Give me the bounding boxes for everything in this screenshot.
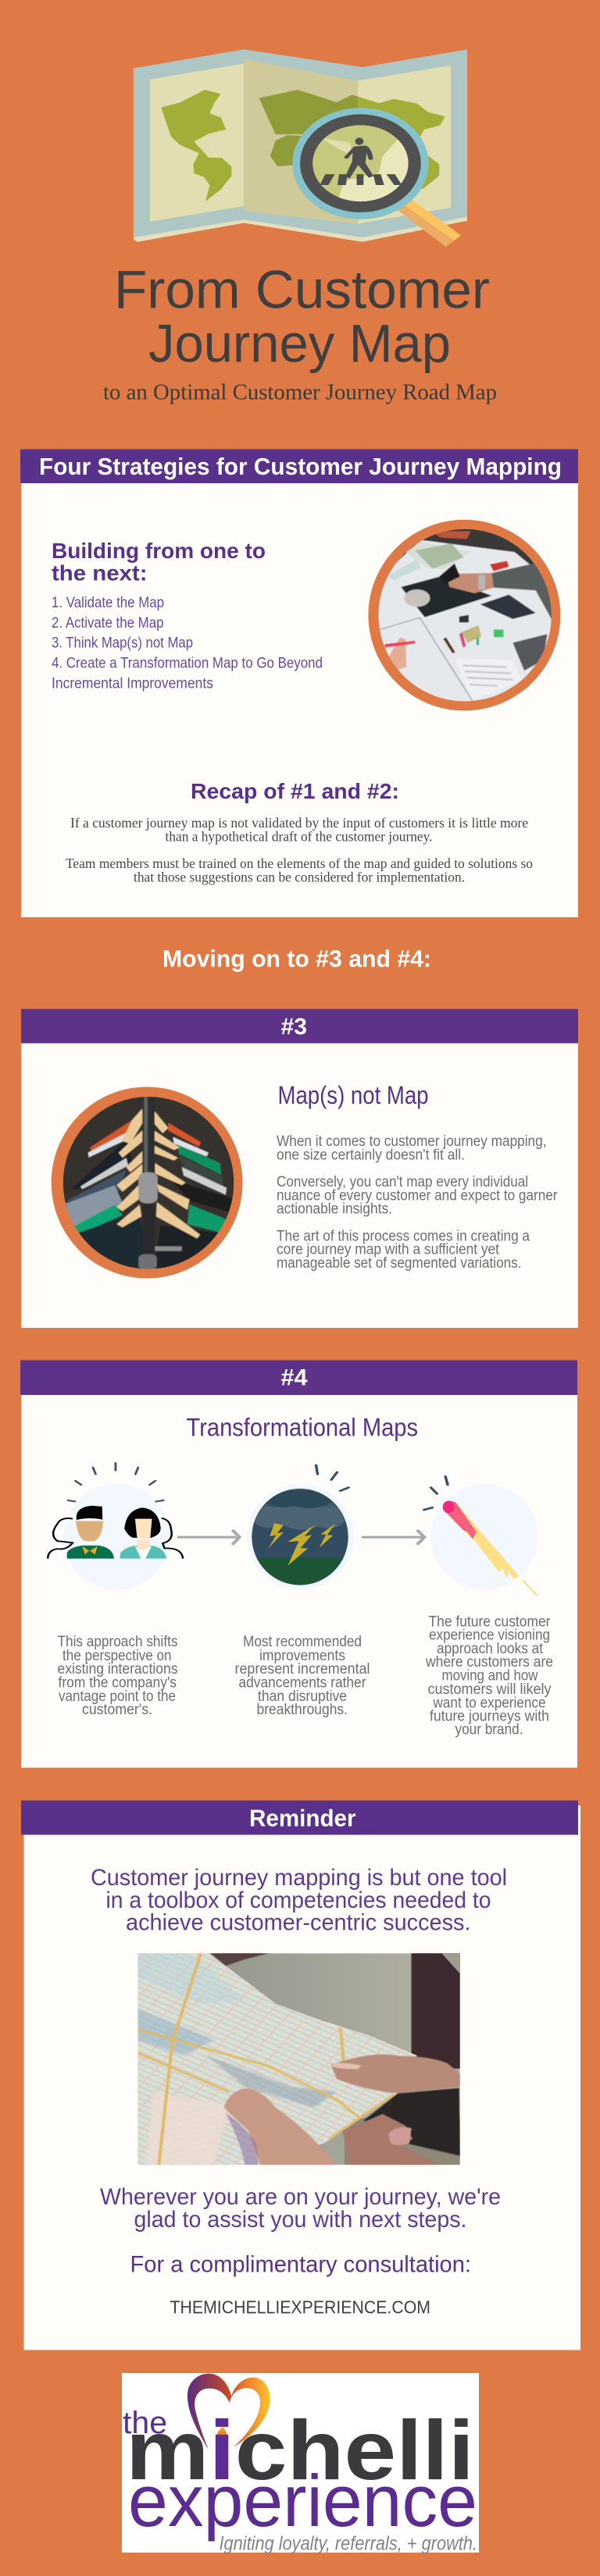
- icon: two customers with radiating lines: [48, 1463, 183, 1590]
- icon: folded map with magnifying glass: [134, 49, 467, 247]
- text: first column: customer's.: [82, 1702, 152, 1718]
- list of four strategies: 1. Validate the Map: [52, 594, 164, 611]
- photo: team working over printed maps on a table: [368, 520, 560, 710]
- body text: maps not map: core journey map with a sufficient yet: [277, 1241, 500, 1258]
- logo word: michelli: michelli: [126, 2403, 474, 2497]
- heading: moving on: Moving on to #3 and #4:: [162, 945, 431, 973]
- website: THEMICHELLIEXPERIENCE.COM: [170, 2297, 430, 2317]
- body text: maps not map: [277, 1133, 558, 1272]
- text: third column: future journeys with: [430, 1708, 549, 1725]
- photo: hands holding a street map: [130, 1949, 463, 2170]
- list of four strategies: 2. Activate the Map: [52, 614, 164, 632]
- arrow: [362, 1530, 424, 1545]
- header: #4: #4: [281, 1364, 308, 1391]
- text: third column: moving and how: [442, 1667, 538, 1685]
- reminder text: in a toolbox of competencies needed to: [106, 1888, 491, 1913]
- text: second column: than disruptive: [258, 1688, 347, 1705]
- body text: maps not map: manageable set of segmented variations.: [277, 1255, 522, 1272]
- icon: comet: [424, 1476, 538, 1596]
- recap text: than a hypothetical draft of the customer journey.: [166, 829, 433, 845]
- recap text: that those suggestions can be considered for implementation.: [134, 870, 465, 885]
- text: second column: breakthroughs.: [256, 1702, 348, 1718]
- subtitle: to an Optimal Customer Journey Road Map: [103, 381, 497, 404]
- text: third column: The future customer: [428, 1614, 551, 1630]
- body text: maps not map: actionable insights.: [277, 1201, 392, 1218]
- panel: four strategies: [20, 450, 578, 917]
- title: [114, 259, 490, 373]
- header: reminder: [21, 1800, 578, 1834]
- logo tagline: Igniting loyalty, referrals, + growth.: [219, 2532, 477, 2554]
- list of four strategies: 4. Create a Transformation Map to Go Beyond: [52, 654, 323, 671]
- text: wherever you are: glad to assist you with next steps.: [134, 2207, 467, 2233]
- heading: maps not map: Map(s) not Map: [278, 1081, 428, 1109]
- text: third column: experience visioning: [429, 1627, 550, 1644]
- text: second column: improvements: [259, 1648, 345, 1664]
- text: wherever you are: Wherever you are on your journey, we're: [100, 2184, 501, 2210]
- text: third column: customers will likely: [428, 1681, 552, 1698]
- text: first column: from the company's: [58, 1675, 177, 1691]
- icon: storm clouds with lightning bolts: [247, 1465, 354, 1590]
- body text: maps not map: The art of this process comes in creating a: [277, 1229, 530, 1244]
- list of four strategies: 3. Think Map(s) not Map: [52, 634, 193, 651]
- reminder text: achieve customer-centric success.: [126, 1909, 470, 1936]
- icon: heart with flame: [188, 2374, 270, 2450]
- list of four strategies: Incremental Improvements: [52, 674, 213, 692]
- text: second column: Most recommended: [243, 1634, 362, 1650]
- body text: maps not map: Conversely, you can't map every individual: [277, 1174, 528, 1190]
- body text: maps not map: When it comes to customer journey mapping,: [277, 1133, 547, 1150]
- heading: building from one to the next: [52, 539, 266, 585]
- recap text: [66, 815, 533, 885]
- recap text: Team members must be trained on the elements of the map and guided to solutions so: [66, 856, 533, 871]
- body text: maps not map: one size certainly doesn't fit all.: [277, 1147, 465, 1163]
- text: third column: want to experience: [433, 1695, 545, 1711]
- panel: reminder: [21, 1800, 580, 2350]
- text: first column: existing interactions: [58, 1661, 178, 1678]
- text: second column: represent incremental: [234, 1661, 370, 1678]
- text: first column: the perspective on: [62, 1648, 172, 1664]
- title: Journey Map: [148, 314, 451, 373]
- text: wherever you are: [100, 2184, 501, 2233]
- heading: transformational maps: Transformational Maps: [186, 1413, 418, 1441]
- text: third column: approach looks at: [437, 1641, 544, 1657]
- text: first column: [58, 1634, 178, 1718]
- header: #4: [20, 1360, 577, 1395]
- title: From Customer: [114, 259, 490, 320]
- reminder text: [91, 1865, 507, 1936]
- text: first column: This approach shifts: [58, 1634, 178, 1650]
- body text: maps not map: nuance of every customer and expect to garner: [277, 1188, 558, 1204]
- header: reminder: Reminder: [249, 1805, 356, 1831]
- header: #3: #3: [281, 1014, 307, 1040]
- reminder text: Customer journey mapping is but one tool: [91, 1865, 507, 1891]
- header: four strategies: Four Strategies for Customer Journey Mapping: [39, 453, 562, 480]
- heading: building from one to the next: Building from one to: [52, 539, 266, 563]
- text: second column: advancements rather: [239, 1675, 366, 1691]
- logo word: experience: experience: [128, 2460, 477, 2542]
- list of four strategies: [52, 594, 323, 692]
- arrow: [177, 1530, 240, 1545]
- logo: the michelli experience: [122, 2373, 479, 2554]
- panel: #4 transformational maps: [20, 1360, 577, 1767]
- text: third column: where customers are: [425, 1654, 553, 1670]
- text: first column: vantage point to the: [59, 1688, 176, 1705]
- recap text: If a customer journey map is not validated by the input of customers it is little more: [70, 815, 528, 831]
- text: third column: your brand.: [455, 1722, 523, 1738]
- photo: shirts on hangers along a rack: [52, 1087, 243, 1279]
- text: second column: [234, 1634, 370, 1718]
- panel: #3 maps not map: [21, 1009, 578, 1328]
- text: complimentary consultation: For a complimentary consultation:: [130, 2251, 471, 2278]
- header: #3: [21, 1009, 578, 1043]
- heading: recap: Recap of #1 and #2:: [191, 779, 399, 803]
- heading: building from one to the next: the next:: [52, 560, 147, 585]
- logo word: the: the: [123, 2406, 167, 2440]
- text: third column: [425, 1614, 553, 1738]
